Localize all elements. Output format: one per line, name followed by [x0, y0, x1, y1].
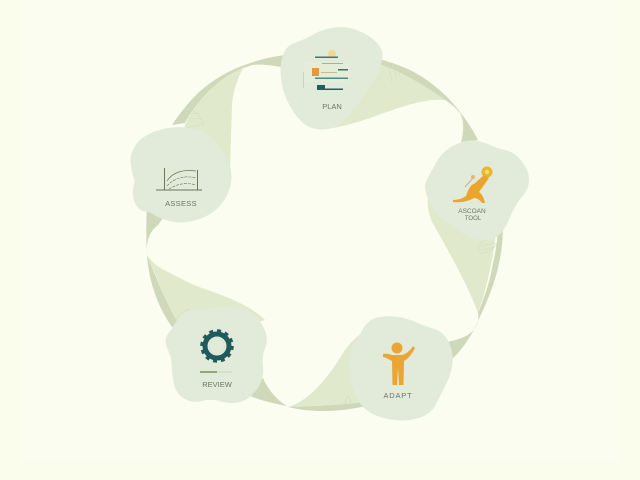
stage: review	[167, 308, 265, 402]
progress bar	[200, 371, 232, 373]
label: assess: ASSESS	[165, 199, 197, 208]
label: adapt: ADAPT	[383, 391, 413, 400]
icon: adapt figure	[383, 342, 415, 385]
review blob	[167, 308, 265, 402]
label: plan: PLAN	[322, 102, 342, 111]
assess blob	[132, 129, 230, 221]
plan blob	[282, 29, 381, 128]
icon: gear	[202, 331, 232, 361]
label: act: ASCOAN	[458, 208, 486, 215]
stage: act	[427, 142, 528, 239]
icon: curve chart	[156, 168, 202, 190]
stage: adapt	[350, 318, 451, 419]
adapt blob	[350, 318, 451, 419]
cycle ring	[146, 55, 503, 411]
label: review: REVIEW	[202, 380, 233, 389]
icon: plan document	[303, 50, 350, 90]
icon: running figure	[453, 166, 492, 203]
stage: assess	[132, 129, 230, 221]
act blob	[427, 142, 528, 239]
stage: act: TOOL	[465, 216, 482, 222]
stage: plan	[282, 29, 381, 128]
